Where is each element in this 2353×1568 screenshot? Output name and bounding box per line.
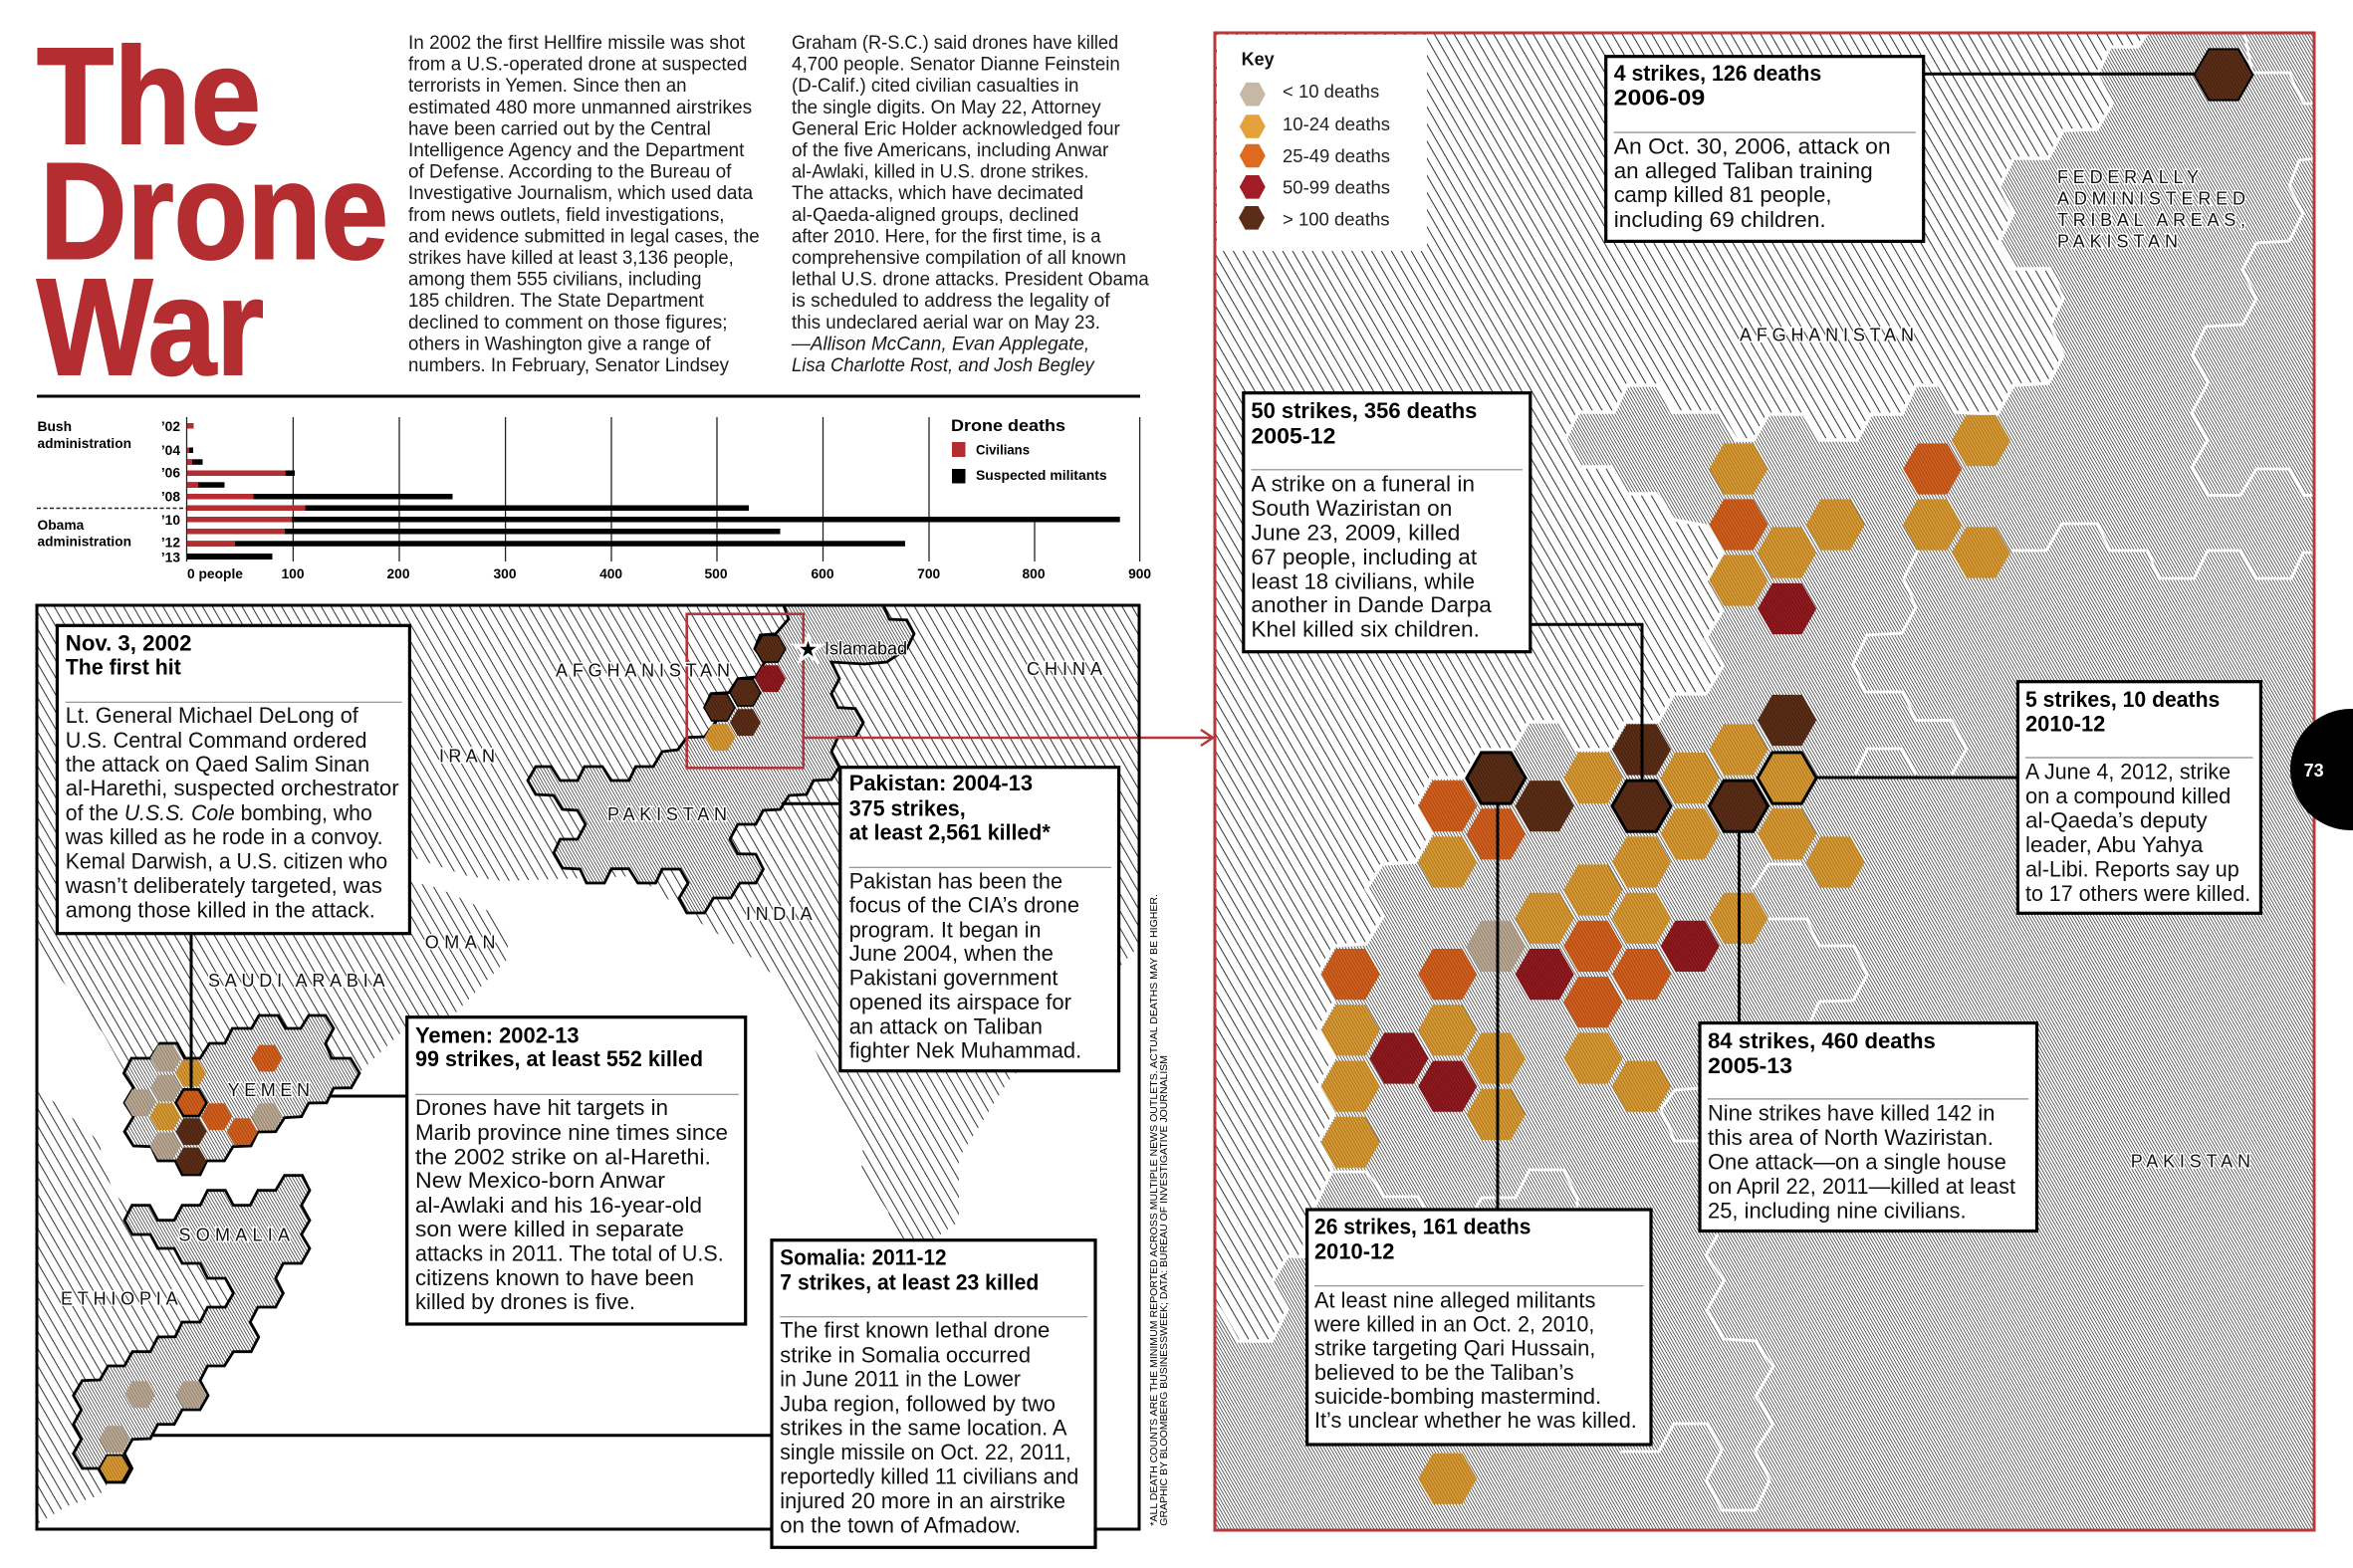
year labels	[161, 419, 180, 565]
heading: Somalia: 2011-12	[780, 1245, 947, 1270]
body: U.S. Central Command ordered	[66, 728, 367, 753]
key swatch: 10-24 deaths: 10-24 deaths	[1283, 113, 1390, 134]
body: June 2004, when the	[849, 941, 1054, 966]
key swatch: 10-24 deaths	[1240, 113, 1390, 138]
intro text column 1	[408, 33, 760, 376]
heading	[1314, 1214, 1530, 1263]
body: focus of the CIA’s drone	[849, 893, 1079, 918]
body: reportedly killed 11 civilians and	[780, 1464, 1078, 1489]
title	[37, 20, 388, 404]
label: Islamabad	[799, 637, 907, 663]
heading: Yemen: 2002-13	[415, 1022, 580, 1047]
heading	[849, 771, 1051, 844]
map frame	[37, 605, 1139, 1529]
callout: 26 strikes	[1307, 1210, 1651, 1445]
country shape: Yemen	[123, 1015, 359, 1175]
body: attacks in 2011. The total of U.S.	[415, 1241, 724, 1266]
strike hex: northern outlying	[2195, 49, 2252, 101]
heading	[415, 1022, 703, 1071]
intro text column 2: the single digits. On May 22, Attorney	[792, 98, 1101, 118]
body: believed to be the Taliban’s	[1314, 1360, 1574, 1385]
key swatch: 25-49 deaths	[1240, 144, 1390, 167]
body: on the town of Afmadow.	[780, 1512, 1021, 1537]
black bars: suspected militants	[187, 448, 1120, 560]
body: Khel killed six children.	[1251, 617, 1480, 642]
body	[65, 703, 399, 923]
title: Drone	[40, 135, 388, 289]
country shape: Somalia	[74, 1176, 310, 1482]
body: 67 people, including at	[1251, 545, 1478, 569]
intro text column 1: of Defense. According to the Bureau of	[408, 162, 732, 183]
country labels: regional map: SOMALIA	[179, 1226, 290, 1245]
callout: 50 strikes	[1244, 393, 1530, 652]
intro text column 2: —Allison McCann, Evan Applegate,	[791, 334, 1089, 354]
body: Lt. General Michael DeLong of	[66, 703, 358, 728]
key swatch: under 10 deaths	[1240, 81, 1379, 106]
body: of the U.S.S. Cole bombing, who	[66, 800, 372, 825]
body: the 2002 strike on al-Harethi.	[415, 1144, 711, 1169]
body: strike in Somalia occurred	[780, 1342, 1031, 1367]
body: another in Dande Darpa	[1251, 592, 1492, 617]
body: leader, Abu Yahya	[2025, 832, 2204, 857]
heading: 26 strikes, 161 deaths	[1314, 1214, 1530, 1238]
body: to 17 others were killed.	[2025, 881, 2250, 906]
country labels: regional map: AFGHANISTAN	[556, 660, 730, 680]
key swatch: 25-49 deaths: 25-49 deaths	[1283, 145, 1390, 166]
leader lines: regional map	[151, 803, 840, 1436]
body	[415, 1095, 728, 1314]
body: An Oct. 30, 2006, attack on	[1614, 134, 1891, 159]
callout: first hit	[57, 625, 409, 934]
year labels: ’12	[161, 536, 180, 550]
intro text column 2: (D-Calif.) cited civilian casualties in	[792, 76, 1078, 97]
year labels: ’02	[161, 419, 180, 434]
intro text column 1: In 2002 the first Hellfire missile was shot	[408, 33, 746, 54]
intro text column 1: and evidence submitted in legal cases, the	[408, 226, 760, 247]
chart legend: Drone deaths	[951, 416, 1065, 435]
footnote and credits: *ALL DEATH COUNTS ARE THE MINIMUM REPORTED ACROSS MULTIPLE NEWS OUTLETS. ACTUAL DEATHS MAY BE HIGHER.	[1148, 894, 1160, 1526]
callout: 4 strikes	[1606, 57, 1924, 241]
country shape: Pakistan	[528, 602, 914, 913]
year labels: ’04	[161, 443, 180, 458]
intro text column 1: terrorists in Yemen. Since then an	[408, 76, 687, 97]
country labels: regional map: SAUDI ARABIA	[208, 971, 384, 991]
intro text column 2: this undeclared aerial war on May 23.	[792, 313, 1100, 334]
year labels: ’06	[161, 466, 180, 480]
intro text column 1: declined to comment on those figures;	[408, 313, 727, 334]
highlighted strike hexes	[1467, 753, 1816, 831]
axis labels	[187, 566, 1151, 581]
key swatch: 50-99 deaths: 50-99 deaths	[1283, 177, 1390, 198]
heading: 7 strikes, at least 23 killed	[780, 1270, 1039, 1295]
administration labels: Bush	[38, 419, 72, 434]
title: The	[37, 20, 261, 173]
body: son were killed in separate	[415, 1217, 684, 1241]
body: Pakistan has been the	[849, 868, 1062, 893]
axis labels: 0 people	[187, 566, 243, 581]
heading: 4 strikes, 126 deaths	[1614, 61, 1821, 86]
administration labels: administration	[38, 534, 131, 550]
body: 25, including nine civilians.	[1708, 1199, 1967, 1223]
country labels: detail map	[1740, 167, 2250, 1171]
body: on a compound killed	[2025, 784, 2231, 808]
intro text column 2: is scheduled to address the legality of	[792, 291, 1110, 312]
panel: detail map of tribal areas	[1213, 31, 2316, 1530]
country labels: detail map: ADMINISTERED	[2057, 189, 2245, 209]
administration labels: Obama	[38, 518, 85, 533]
page number tab	[2290, 709, 2353, 830]
heading: 84 strikes, 460 deaths	[1708, 1028, 1936, 1053]
body: It’s unclear whether he was killed.	[1314, 1408, 1637, 1433]
heading: Pakistan: 2004-13	[849, 771, 1033, 795]
country labels: detail map: TRIBAL AREAS,	[2057, 210, 2245, 230]
axis labels: 200	[386, 566, 410, 581]
heading: at least 2,561 killed*	[849, 819, 1051, 844]
axis labels: 100	[281, 566, 305, 581]
country labels: regional map: YEMEN	[228, 1080, 310, 1100]
key: Key	[1242, 50, 1275, 70]
body: an attack on Taliban	[849, 1013, 1043, 1038]
panel: regional map	[37, 602, 1213, 1547]
body: One attack—on a single house	[1708, 1149, 2006, 1175]
callout: 5 strikes	[2017, 682, 2260, 913]
body: wasn’t deliberately targeted, was	[65, 873, 382, 898]
body: camp killed 81 people,	[1614, 182, 1832, 207]
intro text column 2: lethal U.S. drone attacks. President Obama	[792, 270, 1149, 291]
chart legend: Civilians	[976, 442, 1030, 458]
body: killed by drones is five.	[415, 1289, 635, 1314]
body: A strike on a funeral in	[1251, 472, 1475, 496]
intro text column 2: al-Awlaki, killed in U.S. drone strikes.	[792, 162, 1089, 183]
body: Nine strikes have killed 142 in	[1708, 1101, 1995, 1125]
country labels: detail map: PAKISTAN	[2057, 232, 2178, 252]
heading: 2005-12	[1251, 423, 1335, 448]
administration labels: administration	[38, 436, 131, 451]
heading: The first hit	[66, 654, 181, 679]
strike hexes: Pakistan	[704, 635, 786, 751]
axis labels: 400	[599, 566, 622, 581]
intro text column 1: among them 555 civilians, including	[408, 270, 701, 291]
body	[2025, 760, 2250, 906]
body: on April 22, 2011—killed at least	[1708, 1174, 2016, 1199]
leader lines: detail map	[1498, 74, 2196, 1210]
body: injured 20 more in an airstrike	[780, 1488, 1065, 1513]
country labels: regional map: PAKISTAN	[607, 804, 727, 824]
intro text column 2: of the five Americans, including Anwar	[792, 140, 1109, 161]
bar chart: drone deaths per year	[37, 416, 1151, 581]
country labels: regional map	[61, 659, 1102, 1309]
intro text column 2: 4,700 people. Senator Dianne Feinstein	[792, 55, 1120, 76]
body: were killed in an Oct. 2, 2010,	[1313, 1312, 1594, 1337]
heading: 2005-13	[1708, 1053, 1792, 1078]
heading: 99 strikes, at least 552 killed	[415, 1046, 703, 1071]
intro text column 1: numbers. In February, Senator Lindsey	[408, 355, 729, 376]
body: Juba region, followed by two	[780, 1391, 1056, 1416]
body: program. It began in	[849, 918, 1042, 943]
key swatch: under 10 deaths: < 10 deaths	[1283, 81, 1379, 102]
heading: 2006-09	[1614, 86, 1705, 111]
heading: 5 strikes, 10 deaths	[2025, 687, 2220, 712]
intro text column 2: Lisa Charlotte Rost, and Josh Begley	[792, 355, 1095, 376]
intro text column 1: from news outlets, field investigations,	[408, 205, 725, 226]
intro text column 1: others in Washington give a range of	[408, 334, 711, 354]
chart legend	[951, 416, 1107, 484]
body: South Waziristan on	[1251, 496, 1452, 521]
body: citizens known to have been	[415, 1265, 694, 1290]
axis labels: 600	[811, 566, 834, 581]
chart legend: Suspected militants	[976, 468, 1107, 483]
heading: 2010-12	[1314, 1238, 1394, 1263]
callout: Pakistan	[840, 768, 1119, 1071]
key swatch: over 100 deaths: > 100 deaths	[1283, 209, 1390, 229]
body: among those killed in the attack.	[66, 898, 375, 923]
intro text column 2: The attacks, which have decimated	[792, 183, 1083, 204]
callout: 84 strikes	[1700, 1023, 2037, 1231]
body: fighter Nek Muhammad.	[849, 1038, 1081, 1063]
key swatch: over 100 deaths	[1239, 206, 1390, 230]
country labels: detail map: FEDERALLY	[2057, 167, 2199, 187]
heading	[1708, 1028, 1936, 1078]
callout: Yemen	[407, 1017, 746, 1324]
body: June 23, 2009, killed	[1251, 520, 1460, 545]
axis labels: 500	[704, 566, 728, 581]
body: an alleged Taliban training	[1614, 158, 1873, 183]
key swatch: 50-99 deaths	[1240, 175, 1390, 199]
intro text column 1: Investigative Journalism, which used data	[408, 183, 754, 204]
body: al-Libi. Reports say up	[2025, 857, 2239, 882]
year labels: ’13	[161, 550, 180, 565]
body: strike targeting Qari Hussain,	[1314, 1336, 1595, 1361]
body: the attack on Qaed Salim Sinan	[66, 752, 369, 777]
footnote and credits	[1148, 894, 1170, 1526]
country labels: detail map: AFGHANISTAN	[1740, 325, 1914, 344]
heading: 2010-12	[2025, 711, 2105, 737]
title: War	[37, 251, 264, 404]
heading	[66, 630, 191, 679]
intro text column 2: Graham (R-S.C.) said drones have killed	[792, 33, 1118, 54]
heading: 50 strikes, 356 deaths	[1251, 398, 1477, 423]
footnote and credits: GRAPHIC BY BLOOMBERG BUSINESSWEEK; DATA: BUREAU OF INVESTIGATIVE JOURNALISM	[1158, 1055, 1170, 1526]
red map frame	[1215, 33, 2314, 1530]
country labels: regional map: INDIA	[746, 904, 813, 924]
body	[1614, 134, 1891, 232]
key	[1239, 50, 1390, 230]
strike hexes: Somalia	[100, 1381, 207, 1481]
administration labels	[37, 419, 186, 550]
page number tab: 73	[2304, 761, 2324, 781]
intro text column 1: from a U.S.-operated drone at suspected	[408, 55, 747, 76]
body: including 69 children.	[1614, 207, 1826, 232]
intro text column 1: 185 children. The State Department	[408, 291, 705, 312]
intro text column 2: General Eric Holder acknowledged four	[792, 118, 1120, 139]
body: suicide-bombing mastermind.	[1314, 1384, 1601, 1409]
intro text column 1: have been carried out by the Central	[408, 118, 711, 139]
body: Drones have hit targets in	[415, 1095, 668, 1120]
body: in June 2011 in the Lower	[780, 1367, 1021, 1392]
heading	[2025, 687, 2220, 737]
zoom box and arrow to detail map	[687, 614, 1213, 768]
body: Pakistani government	[849, 965, 1059, 990]
body	[780, 1317, 1078, 1537]
intro text column 2	[791, 33, 1149, 376]
body: al-Qaeda’s deputy	[2025, 808, 2208, 833]
country labels: regional map: IRAN	[439, 747, 495, 767]
body	[1313, 1287, 1637, 1433]
intro text column 1: estimated 480 more unmanned airstrikes	[408, 98, 752, 118]
label: Islamabad: Islamabad	[824, 639, 907, 659]
body	[1708, 1101, 2016, 1223]
country labels: regional map: ETHIOPIA	[61, 1289, 178, 1309]
body: al-Awlaki and his 16-year-old	[415, 1193, 702, 1218]
intro text column 2: al-Qaeda-aligned groups, declined	[792, 205, 1078, 226]
year labels: ’08	[161, 490, 180, 504]
intro text column 2: comprehensive compilation of all known	[792, 248, 1126, 269]
intro text column 2: after 2010. Here, for the first time, is a	[792, 226, 1101, 247]
heading	[1251, 398, 1477, 448]
body: was killed as he rode in a convoy.	[65, 824, 383, 849]
body: At least nine alleged militants	[1314, 1287, 1595, 1312]
axis labels: 300	[493, 566, 517, 581]
body: Kemal Darwish, a U.S. citizen who	[66, 849, 387, 874]
label: Islamabad: ★	[799, 637, 818, 663]
body: al-Harethi, suspected orchestrator	[66, 776, 399, 800]
body: least 18 civilians, while	[1251, 568, 1475, 593]
body: The first known lethal drone	[780, 1317, 1050, 1342]
callout: Somalia	[772, 1240, 1095, 1547]
country labels: regional map: OMAN	[425, 933, 496, 953]
strike hexes: upper cluster	[1709, 415, 2010, 634]
intro text column 1: strikes have killed at least 3,136 people,	[408, 248, 734, 269]
body: strikes in the same location. A	[780, 1416, 1067, 1441]
country labels: regional map: CHINA	[1027, 659, 1102, 679]
red bars: civilians	[187, 423, 306, 547]
axis labels: 700	[917, 566, 941, 581]
body	[849, 868, 1081, 1063]
year labels: ’10	[161, 513, 180, 528]
body: single missile on Oct. 22, 2011,	[780, 1440, 1071, 1464]
strike hexes: Yemen	[124, 1045, 283, 1174]
body: A June 4, 2012, strike	[2025, 760, 2231, 784]
intro text column 1: Intelligence Agency and the Department	[408, 140, 745, 161]
body	[1251, 472, 1492, 642]
strike hexes: main cluster	[1321, 695, 1865, 1504]
heading: 375 strikes,	[849, 795, 966, 820]
body: opened its airspace for	[849, 990, 1071, 1014]
heading	[1614, 61, 1821, 111]
heading: Nov. 3, 2002	[66, 630, 191, 655]
axis labels: 800	[1022, 566, 1046, 581]
body: this area of North Waziristan.	[1708, 1125, 1994, 1150]
axis labels: 900	[1128, 566, 1151, 581]
country labels: detail map: PAKISTAN	[2131, 1151, 2250, 1171]
body: Marib province nine times since	[415, 1120, 728, 1145]
body: New Mexico-born Anwar	[415, 1168, 665, 1193]
heading	[780, 1245, 1039, 1295]
